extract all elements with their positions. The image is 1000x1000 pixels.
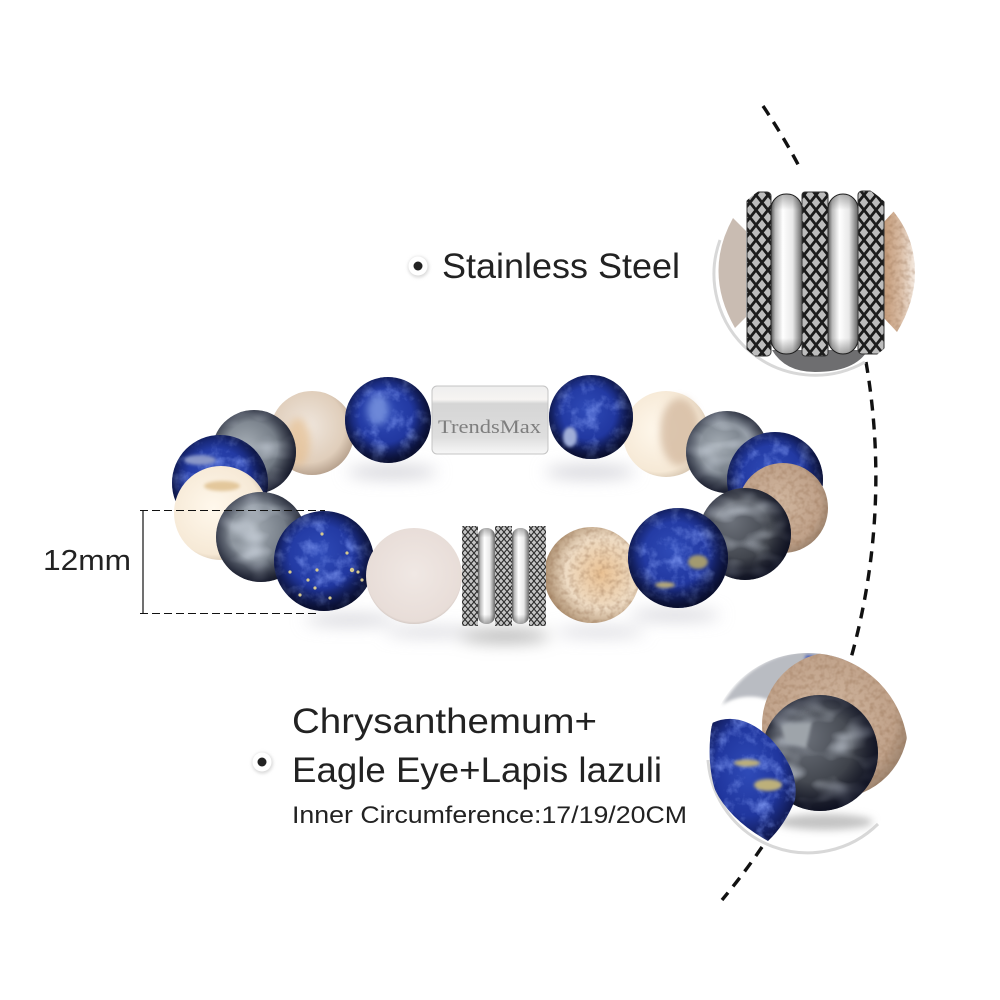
spacer bar xyxy=(512,528,529,624)
bead: lapis top right xyxy=(549,375,633,459)
tan bead xyxy=(762,652,908,798)
label: materials: Eagle Eye+Lapis lazuli xyxy=(292,751,662,790)
bead: lapis front left xyxy=(274,511,374,611)
shadow xyxy=(777,814,873,830)
clasp with logo xyxy=(432,386,548,454)
ring 3 xyxy=(858,191,884,354)
blurred background beads xyxy=(722,653,840,705)
bar 1 xyxy=(771,194,802,354)
bead: lapis front right xyxy=(628,508,728,608)
bead: eagle eye upper left xyxy=(212,410,296,494)
bead: lapis left back xyxy=(172,435,268,531)
label: materials xyxy=(252,702,687,829)
bead: tan right xyxy=(738,463,828,553)
bead shadows xyxy=(305,466,720,642)
bead: lapis top left xyxy=(345,377,431,463)
spacer ring xyxy=(529,526,546,626)
steel spacer xyxy=(462,526,546,626)
spacer ring xyxy=(462,526,478,626)
bead: tan front xyxy=(544,527,640,623)
inset: beads close-up xyxy=(708,649,908,853)
inset: steel spacer close-up xyxy=(714,191,915,375)
bead: eagle eye front right xyxy=(699,488,791,580)
dimension: 12mm: 12mm xyxy=(43,545,131,577)
ring 1 xyxy=(747,192,771,356)
spacer ring xyxy=(495,526,512,626)
right stone slice xyxy=(883,210,915,332)
spacer bar xyxy=(478,528,495,624)
label: materials: Chrysanthemum+ xyxy=(292,702,597,741)
ring 2 xyxy=(802,192,828,356)
dimension: 12mm xyxy=(43,510,325,614)
bead: pale front xyxy=(366,528,462,624)
spacer shadow xyxy=(772,350,868,372)
label: materials: Inner Circumference:17/19/20CM xyxy=(292,802,687,829)
clasp with logo: TrendsMax xyxy=(438,417,542,438)
bead: eagle eye upper right xyxy=(686,411,768,493)
bead: lapis right back xyxy=(727,432,823,528)
bar 2 xyxy=(828,194,858,354)
dashed arc callout line xyxy=(722,106,876,900)
lapis bead xyxy=(710,719,796,841)
bead: chrysanthemum upper right xyxy=(623,391,709,477)
label: stainless steel: Stainless Steel xyxy=(442,247,680,286)
bead: chrysanthemum upper left xyxy=(270,391,354,475)
bead: cream left xyxy=(174,466,268,560)
left stone slice xyxy=(718,218,746,328)
bracelet xyxy=(172,375,828,642)
bead: eagle eye left front xyxy=(216,492,306,582)
eagle eye bead xyxy=(762,695,878,811)
